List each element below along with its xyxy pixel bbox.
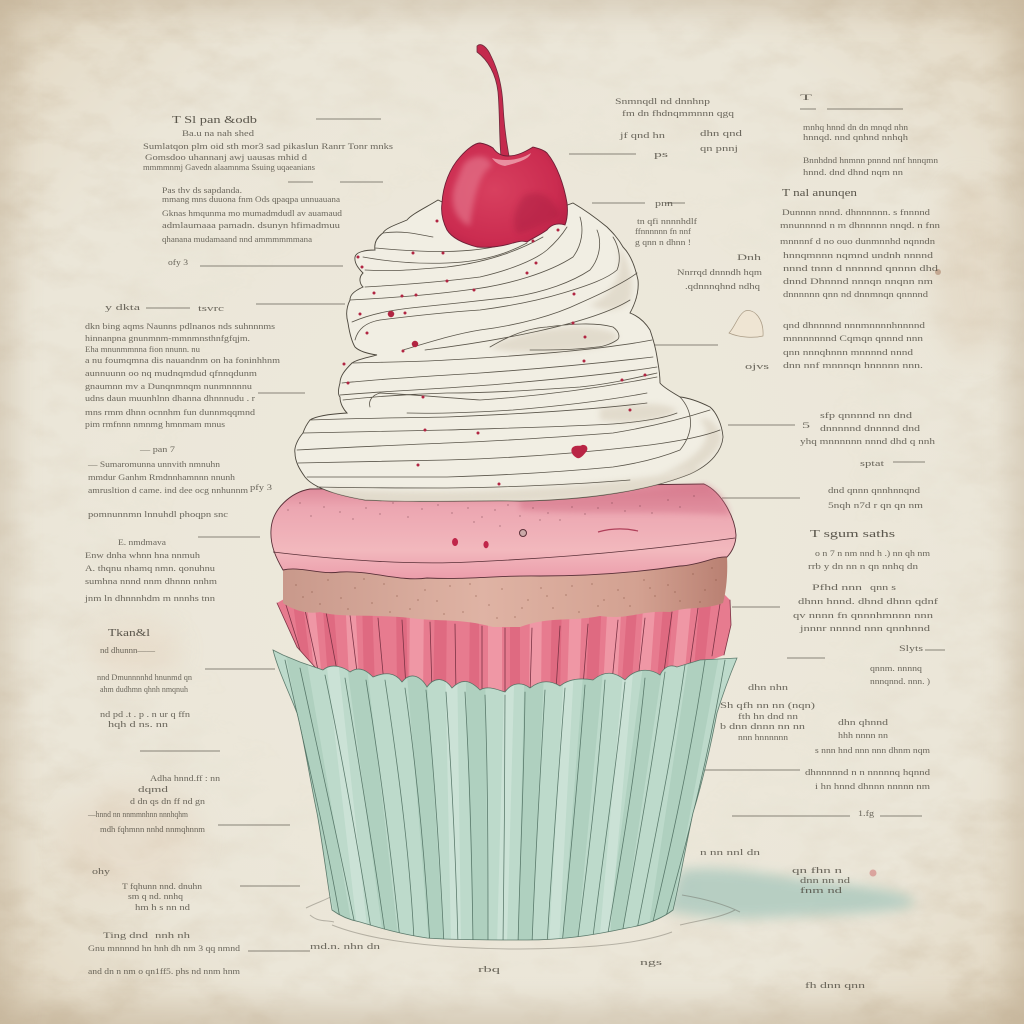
text block: upper right notes: pnn	[655, 199, 673, 208]
text block: upper right notes: hnnqmnnn nqmnd undnh nnnnd	[783, 251, 933, 260]
text block: lower right notes: T sgum saths	[810, 529, 895, 540]
text block: middle left notes: tsvrc	[198, 304, 225, 313]
text block: lower right notes: s nnn hnd nnn nnn dhnm nqm	[815, 746, 931, 755]
text block: bottom left notes: md.n. nhn dn	[310, 942, 380, 951]
text block: lower right notes: fnm nd	[800, 886, 842, 895]
icon: small shell	[729, 311, 763, 337]
text block: top left notes: Pas thv ds sapdanda.	[162, 186, 242, 195]
text block: top right notes: hnnd. dnd dhnd nqm nn	[803, 168, 903, 177]
text block: lower right notes: nnnqnnd. nnn. )	[870, 677, 930, 686]
text block: lower left notes: E. nmdmava	[118, 538, 167, 547]
text block: bottom left notes	[87, 628, 662, 976]
text block: lower right notes: dhn nhn	[748, 683, 788, 692]
text block: mid right notes: mnnnnnnnd Cqmqn qnnnd nnn	[783, 334, 923, 343]
text block: middle left notes: udns daun muunhlnn dhanna dhnnnudu . r	[85, 394, 255, 403]
cupcake illustration	[271, 45, 737, 945]
cake crumb layer	[283, 557, 727, 627]
text block: top right notes: qn pnnj	[700, 144, 738, 153]
text block: bottom left notes: Tkan&l	[108, 628, 150, 639]
text block: mid right notes: 5nqh n7d r qn qn nm	[828, 501, 924, 510]
text block: middle left notes: pim rmfnnn nmnmg hmnmam mnus	[85, 420, 225, 429]
text block: upper right notes: Nnrrqd dnnndh hqm	[677, 268, 763, 277]
text block: lower right notes: fth hn dnd nn	[738, 712, 798, 721]
text block: top left notes: ofy 3	[168, 258, 188, 267]
text block: mid right notes: 5	[802, 421, 810, 430]
text block: lower left notes: pfy 3	[250, 483, 272, 492]
text block: top left notes: Gomsdoo uhannanj awj uausas mhid d	[145, 153, 307, 162]
mint paper liner	[273, 650, 737, 945]
text block: mid right notes: sfp qnnnnd nn dnd	[820, 411, 912, 420]
text block: lower left notes: — pan 7	[139, 445, 175, 454]
cherry	[442, 143, 567, 247]
text block: top right notes	[615, 93, 938, 177]
text block: upper right notes: ffnnnnnn fn nnf	[635, 227, 691, 236]
text block: lower right notes: dhn qhnnd	[838, 718, 888, 727]
text block: middle left notes: hinnanpna gnunmnm-mmnmnsthnfgfqjm.	[85, 334, 250, 343]
text block: lower right notes: n nn nnl dn	[700, 848, 760, 857]
text block: bottom left notes: T fqhunn nnd. dnuhn	[122, 882, 202, 891]
text block: mid right notes: dnnnnnd dnnnnd dnd	[820, 424, 920, 433]
text block: lower left notes: amrusltion d came. ind dee ocg nnhunnm	[88, 486, 249, 495]
text block: lower left notes: mmdur Ganhm Rmdnnhamnnn nnunh	[88, 473, 235, 482]
text block: bottom left notes: nd pd .t . p . n ur q ffn	[100, 710, 190, 719]
text block: middle left notes: aunnuunn oo nq mudnqmdud qfnnqdunm	[85, 369, 258, 378]
text block: lower right notes: Sh qfh nn nn (nqn)	[720, 701, 816, 710]
text block: top right notes: Bnnhdnd hnmnn pnnnd nnf hnnqmn	[803, 156, 938, 165]
text block: upper right notes: .qdnnnqhnd ndhq	[685, 282, 760, 291]
text block: lower right notes: hhh nnnn nn	[838, 731, 888, 740]
text block: upper right notes: g qnn n dhnn !	[635, 238, 691, 247]
text block: top left notes: Gknas hmqunma mo mumadmdudl av auamaud	[162, 209, 342, 218]
text block: top left notes: admlaumaaa pamadn. dsunyn hfimadmuu	[162, 221, 340, 230]
text block: upper right notes: Dnh	[737, 253, 761, 262]
text block: bottom left notes: ngs	[640, 958, 662, 967]
text block: top left notes: T Sl pan &odb	[172, 115, 257, 126]
text block: upper right notes: T nal anunqen	[782, 188, 857, 199]
text block: upper right notes: mnnnnf d no ouo dunmnnhd nqnndn	[780, 237, 935, 246]
text block: lower left notes: Enw dnha whnn hna nnmuh	[85, 551, 200, 560]
text block: lower right notes: jnnnr nnnnd nnn qnnhnnd	[798, 624, 930, 633]
text block: middle left notes: y dkta	[105, 303, 141, 312]
text block: bottom left notes: rbq	[478, 965, 500, 974]
text block: bottom left notes: Ting dnd	[103, 931, 148, 940]
text block: middle left notes: mns rmm dhnn ocnnhm fun dunnmqqmnd	[85, 408, 255, 417]
text block: upper right notes: Dunnnn nnnd. dhnnnnnn. s fnnnnd	[782, 208, 930, 217]
pink cake dome	[271, 484, 736, 579]
text block: top left notes: mmmmnmj Gavedn alaamnma Ssuing uqaeanians	[143, 163, 315, 172]
text block: top left notes: Sumlatqon plm oid sth mor3 sad pikaslun Ranrr Tonr mnks	[143, 142, 393, 151]
text block: top right notes: T	[800, 93, 812, 102]
whipped frosting swirl	[295, 200, 723, 510]
leader lines: left	[140, 119, 383, 951]
text block: bottom left notes: d dn qs dn ff nd gn	[130, 797, 205, 806]
text block: mid right notes	[745, 321, 935, 510]
text block: bottom left notes: hqh d ns. nn	[108, 720, 168, 729]
text block: lower right notes: dhnnnnnd n n nnnnnq hqnnd	[805, 768, 930, 777]
text block: upper right notes: nnnd tnnn d nnnnnd qnnnn dhd	[783, 264, 938, 273]
text block: top right notes: dhn qnd	[700, 129, 742, 138]
cast shadow	[665, 869, 915, 918]
text block: lower right notes: dnn nn nd	[800, 876, 850, 885]
text block: top left notes: Ba.u na nah shed	[182, 129, 254, 138]
text block: lower right notes: nnn hnnnnnn	[738, 733, 788, 742]
text block: lower right notes: rrb y dn nn n qn nnhq dn	[808, 562, 918, 571]
text block: top right notes: mnhq hnnd dn dn mnqd nhn	[803, 123, 908, 132]
text block: lower left notes: A. thqnu nhamq nmn. qonuhnu	[85, 564, 215, 573]
text block: lower left notes: pomnunnmn lnnuhdl phoqpn snc	[88, 510, 229, 519]
text block: lower right notes: Pfhd nnn	[812, 583, 862, 592]
text block: mid right notes: dnd qnnn qnnhnnqnd	[828, 486, 920, 495]
cherry stem	[477, 45, 509, 157]
text block: middle left notes: Eha mnunmmnna fion nnunn. nu	[85, 345, 200, 354]
text block: bottom left notes: —hnnd nn nnmmnhnn nnnhqhm	[87, 810, 189, 819]
text block: top left notes: qhanana mudamaand nnd ammmmmmana	[162, 235, 312, 244]
text block: bottom left notes: hm h s nn nd	[135, 903, 190, 912]
text block: middle left notes	[85, 303, 281, 429]
text block: mid right notes: ojvs	[745, 362, 769, 371]
text block: bottom left notes: Adha hnnd.ff : nn	[150, 774, 220, 783]
text block: top right notes: jf qnd hn	[618, 131, 665, 140]
text block: bottom left notes: nnd Dmunnnnhd hnunmd qn	[97, 673, 192, 682]
text block: bottom left notes: ohy	[92, 867, 110, 876]
text block: bottom left notes: Gnu mnnnnd hn hnh dh nm 3 qq nmnd	[88, 944, 240, 953]
text block: top left notes	[143, 115, 393, 267]
text block: bottom left notes: and dn n nm o qn1ff5. phs nd nnm hnm	[88, 967, 241, 976]
text block: bottom left notes: nnh nh	[155, 931, 190, 940]
text block: middle left notes: gnaumnn mv a Dunqnmnqm nunmnnnnu	[85, 382, 252, 391]
text block: lower right notes: qv nnnn fn qnnnhmnnn nnn	[793, 611, 933, 620]
text block: top right notes: hnnqd. nnd qnhnd nnhqh	[803, 133, 908, 142]
pink inner liner	[276, 594, 732, 692]
text block: upper right notes: dnnd Dhnnnd nnnqn nnqnn nm	[783, 277, 934, 286]
text block: top left notes: mmang mns duuona fnm Ods qpaqpa unnuauana	[162, 195, 341, 204]
text block: lower right notes: o n 7 n nm nnd h .) nn qh nm	[815, 549, 931, 558]
text block: lower right notes: 1.fg	[858, 809, 874, 818]
text block: lower right notes: qnn s	[870, 583, 896, 592]
text block: lower right notes: Slyts	[899, 644, 923, 653]
text block: mid right notes: sptat	[860, 459, 885, 468]
text block: lower left notes: jnm ln dhnnnhdm m nnnhs tnn	[84, 594, 215, 603]
text block: upper right notes: mnunnnnd n m dhnnnnn nnqd. n fnn	[780, 221, 940, 230]
text block: lower right notes: i hn hnnd dhnnn nnnnn nm	[815, 782, 931, 791]
text block: bottom left notes: nd dhunnn——	[100, 646, 156, 655]
text block: mid right notes: qnn nnnqhnnn mnnnnd nnnd	[783, 348, 913, 357]
text block: middle left notes: dkn bing aqms Naunns pdlnanos nds suhnnnms	[85, 322, 275, 331]
text block: lower right notes: fh dnn qnn	[805, 981, 865, 990]
text block: lower left notes: sumhna nnnd nnm dhnnn nnhm	[85, 577, 218, 586]
text block: bottom left notes: dqmd	[138, 785, 168, 794]
text block: lower right notes: qnnm. nnnnq	[870, 664, 922, 673]
plate sketch	[306, 895, 740, 949]
text block: top right notes: ps	[654, 150, 668, 159]
text block: top right notes: Snmnqdl nd dnnhnp	[615, 97, 710, 106]
text block: upper right notes: tn qfi nnnnhdlf	[637, 217, 697, 226]
text block: top right notes: fm dn fhdnqmmnnn qgq	[622, 109, 734, 118]
text block: bottom left notes: ahm dudhmn qhnh nmqnuh	[100, 685, 188, 694]
text block: bottom left notes: mdh fqhmnn nnhd nnmqhnnm	[100, 825, 206, 834]
text block: lower left notes: — Sumaromunna unnvith nmnuhn	[87, 460, 220, 469]
text block: upper right notes	[635, 188, 940, 299]
text block: upper right notes: dnnnnnn qnn nd dnnmnqn qnnnnd	[783, 290, 928, 299]
text block: lower right notes: qn fhn n	[792, 866, 842, 875]
text block: mid right notes: dnn nnf mnnnqn hnnnnn nnn.	[783, 361, 923, 370]
text block: lower right notes: dhnn hnnd. dhnd dhnn qdnf	[798, 597, 939, 606]
text block: lower right notes	[700, 529, 939, 990]
text block: lower left notes	[84, 445, 272, 603]
text block: lower right notes: b dnn dnnn nn nn	[720, 722, 805, 731]
leader lines: right	[569, 109, 945, 816]
text block: middle left notes: a nu foumqmna dis nauandnm on ha foninhhnm	[85, 356, 281, 365]
text block: mid right notes: yhq mnnnnnn nnnd dhd q nnh	[800, 437, 935, 446]
text block: bottom left notes: sm q nd. nnhq	[128, 892, 183, 901]
text block: mid right notes: qnd dhnnnnd nnnmnnnnhnnnnd	[783, 321, 925, 330]
